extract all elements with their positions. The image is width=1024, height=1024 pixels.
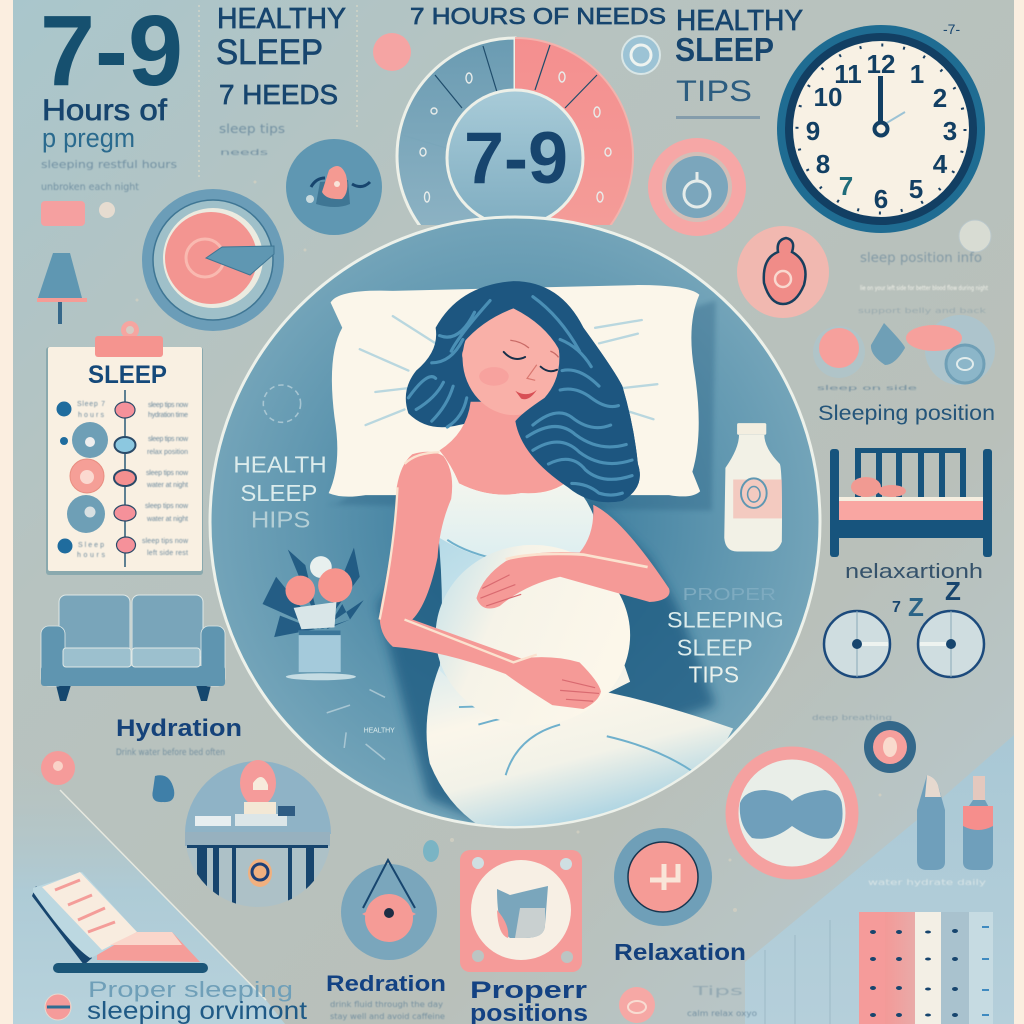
gauge: 7-9 hours: 7-9 — [464, 118, 568, 199]
icon: hanging charm — [341, 860, 437, 960]
label: relaxation with z letters: Z — [908, 592, 924, 622]
heading: 7-9 hours of pregnancy: unbroken each night — [41, 182, 139, 193]
text block: bottom notes — [687, 984, 757, 1018]
tank top — [440, 468, 594, 557]
chest and neck — [440, 402, 570, 495]
chart: bars with dots — [765, 912, 993, 1024]
label: redration: stay well and avoid caffeine — [330, 1012, 445, 1021]
clock: 3 — [943, 116, 957, 146]
panel: sleep clipboard: water at night — [146, 516, 188, 523]
panel: sleep clipboard: sleep tips now — [148, 436, 189, 443]
panel: sleep clipboard: left side rest — [147, 550, 188, 557]
icon: sofa — [41, 595, 225, 701]
body shadow — [377, 503, 716, 828]
icon: bed — [830, 448, 992, 557]
icon: pink dot — [373, 33, 411, 71]
panel: sleep clipboard — [46, 321, 203, 575]
clock: 1 — [910, 59, 924, 89]
belly — [436, 545, 630, 725]
clock: 6 — [874, 184, 888, 214]
panel: sleep clipboard: Sleep — [78, 542, 104, 549]
clock: 10 — [814, 82, 842, 112]
captions inside circle: SLEEPING — [667, 607, 784, 632]
heading: healthy sleep tips: TIPS — [676, 75, 752, 108]
text block: sleep info: sleep position info — [860, 251, 982, 266]
icon: pink dot with specks — [41, 751, 75, 785]
icon: blue blob — [152, 775, 174, 802]
panel: sleep clipboard: relax position — [147, 449, 188, 456]
panel: sleep clipboard: hydration time — [148, 412, 188, 419]
icon: small pink bottom — [619, 987, 655, 1023]
heading: healthy sleep 7 needs: 7 HEEDS — [219, 79, 338, 110]
hair back — [406, 281, 640, 502]
heading: 7-9 hours of pregnancy — [40, 0, 183, 226]
icon: small pink target — [864, 721, 916, 773]
label: hydration: Hydration — [116, 715, 242, 742]
captions inside circle: SLEEP — [240, 480, 317, 506]
heading: healthy sleep tips: SLEEP — [675, 31, 774, 68]
panel: sleep clipboard: sleep tips now — [145, 503, 189, 510]
icon: small badge — [622, 36, 660, 74]
label: redration: drink fluid through the day — [330, 1000, 444, 1009]
heading: 7-9 hours of pregnancy: sleeping restful hours — [41, 158, 177, 171]
hair front — [408, 282, 640, 502]
label: relaxation with z letters: Z — [945, 576, 961, 606]
text block: sleep info — [858, 220, 991, 315]
pillow — [327, 285, 716, 511]
label: relaxation with z letters: 7 — [892, 599, 901, 616]
captions inside circle: HEALTHY — [364, 727, 395, 734]
main illustration: pregnant woman sleeping — [210, 217, 820, 828]
panel: pillow position tile — [460, 850, 582, 972]
heading: healthy sleep 7 needs: sleep tips — [219, 122, 285, 136]
icon: pregnant pin — [286, 139, 382, 235]
captions inside circle — [233, 452, 784, 734]
icons: sleeping position shapes — [813, 315, 995, 392]
label: proper sleeping environment: Proper sleeping — [88, 977, 293, 1002]
clock: 2 — [933, 83, 947, 113]
captions inside circle: PROPER — [683, 585, 776, 604]
label: redration — [326, 971, 446, 1021]
text block: sleep info: support belly and back — [858, 307, 988, 315]
icon: small teal swirl — [423, 840, 439, 862]
heading: healthy sleep 7 needs: needs — [220, 148, 268, 157]
clock: 8 — [816, 149, 830, 179]
captions inside circle: HEALTH — [233, 452, 327, 478]
label: proper sleeping environment — [45, 977, 307, 1024]
heading: healthy sleep tips: HEALTHY — [676, 5, 803, 37]
bottle — [724, 423, 782, 551]
clock: 12 — [867, 49, 895, 79]
far arm — [476, 505, 670, 609]
heading: healthy sleep tips — [675, 5, 803, 119]
heading: healthy sleep 7 needs: HEALTHY — [217, 3, 346, 35]
label: sleeping position: Sleeping position — [818, 402, 995, 425]
clock: 7 — [839, 171, 853, 201]
icons: bottles: water hydrate daily — [868, 878, 986, 887]
text block: small notes right: deep breathing — [812, 714, 892, 722]
heading: 7-9 hours of pregnancy: p pregm — [42, 123, 135, 153]
text block: sleep info: lie on your left side for better blood flow during night — [860, 285, 989, 292]
panel: sleep clipboard: SLEEP — [88, 361, 167, 389]
heading: healthy sleep 7 needs — [216, 3, 346, 157]
icon: book — [32, 872, 208, 973]
label: hydration — [116, 715, 242, 758]
label: relaxation with z letters: nelaxartionh — [845, 561, 983, 583]
text block: bottom notes: Tips — [691, 984, 743, 998]
icon: lamp — [37, 253, 87, 324]
label: proper positions — [470, 977, 588, 1024]
icon: hanging pink circle — [737, 226, 829, 318]
panel: sleep clipboard: hours — [78, 412, 104, 419]
body dress — [439, 538, 630, 692]
legs — [427, 666, 733, 828]
icon: dial — [142, 189, 284, 331]
gauge: 7-9 hours — [396, 36, 634, 225]
label: hydration: Drink water before bed often — [116, 748, 225, 758]
heading: healthy sleep 7 needs: SLEEP — [216, 33, 323, 72]
flowers in vase — [263, 548, 364, 680]
panel: sleep clipboard: hours — [77, 552, 106, 559]
near arm — [380, 452, 601, 709]
panel: sleep clipboard: sleep tips now — [146, 470, 189, 477]
label: relaxation with z letters — [845, 561, 983, 622]
icon: corner mark: -7- — [943, 21, 960, 37]
captions inside circle: SLEEP — [677, 634, 753, 660]
icons: bottles — [868, 775, 993, 887]
clock: 9 — [806, 116, 820, 146]
heading: 7-9 hours of pregnancy: Hours of — [42, 94, 168, 127]
panel: sleep clipboard: sleep tips now — [148, 402, 189, 409]
clock: 11 — [834, 59, 862, 89]
icon: bedside table — [185, 760, 331, 910]
icon: relaxation button — [614, 828, 712, 926]
label: relaxation: Relaxation — [614, 939, 746, 965]
panel: sleep clipboard: Sleep 7 — [77, 401, 105, 408]
captions inside circle: TIPS — [688, 662, 739, 688]
label: redration: Redration — [326, 971, 446, 996]
head — [462, 308, 560, 415]
panel: sleep clipboard: water at night — [146, 482, 188, 489]
icon: pink ring — [648, 138, 746, 236]
label: proper positions: Properr — [470, 977, 587, 1004]
clock — [777, 25, 985, 233]
text block: bottom notes: calm relax oxyo — [687, 1009, 757, 1018]
clock: 5 — [909, 174, 923, 204]
panel: sleep clipboard: sleep tips now — [142, 538, 189, 545]
icon: eye mask ring — [732, 753, 852, 873]
icons: two dials — [824, 611, 984, 677]
clock: 4 — [933, 149, 948, 179]
decorative marks in circle — [263, 385, 385, 760]
captions inside circle: HIPS — [251, 506, 310, 532]
icons: sleeping position shapes: sleep on side — [817, 384, 917, 392]
heading: hours of needs: 7 HOURS OF NEEDS — [410, 3, 666, 29]
